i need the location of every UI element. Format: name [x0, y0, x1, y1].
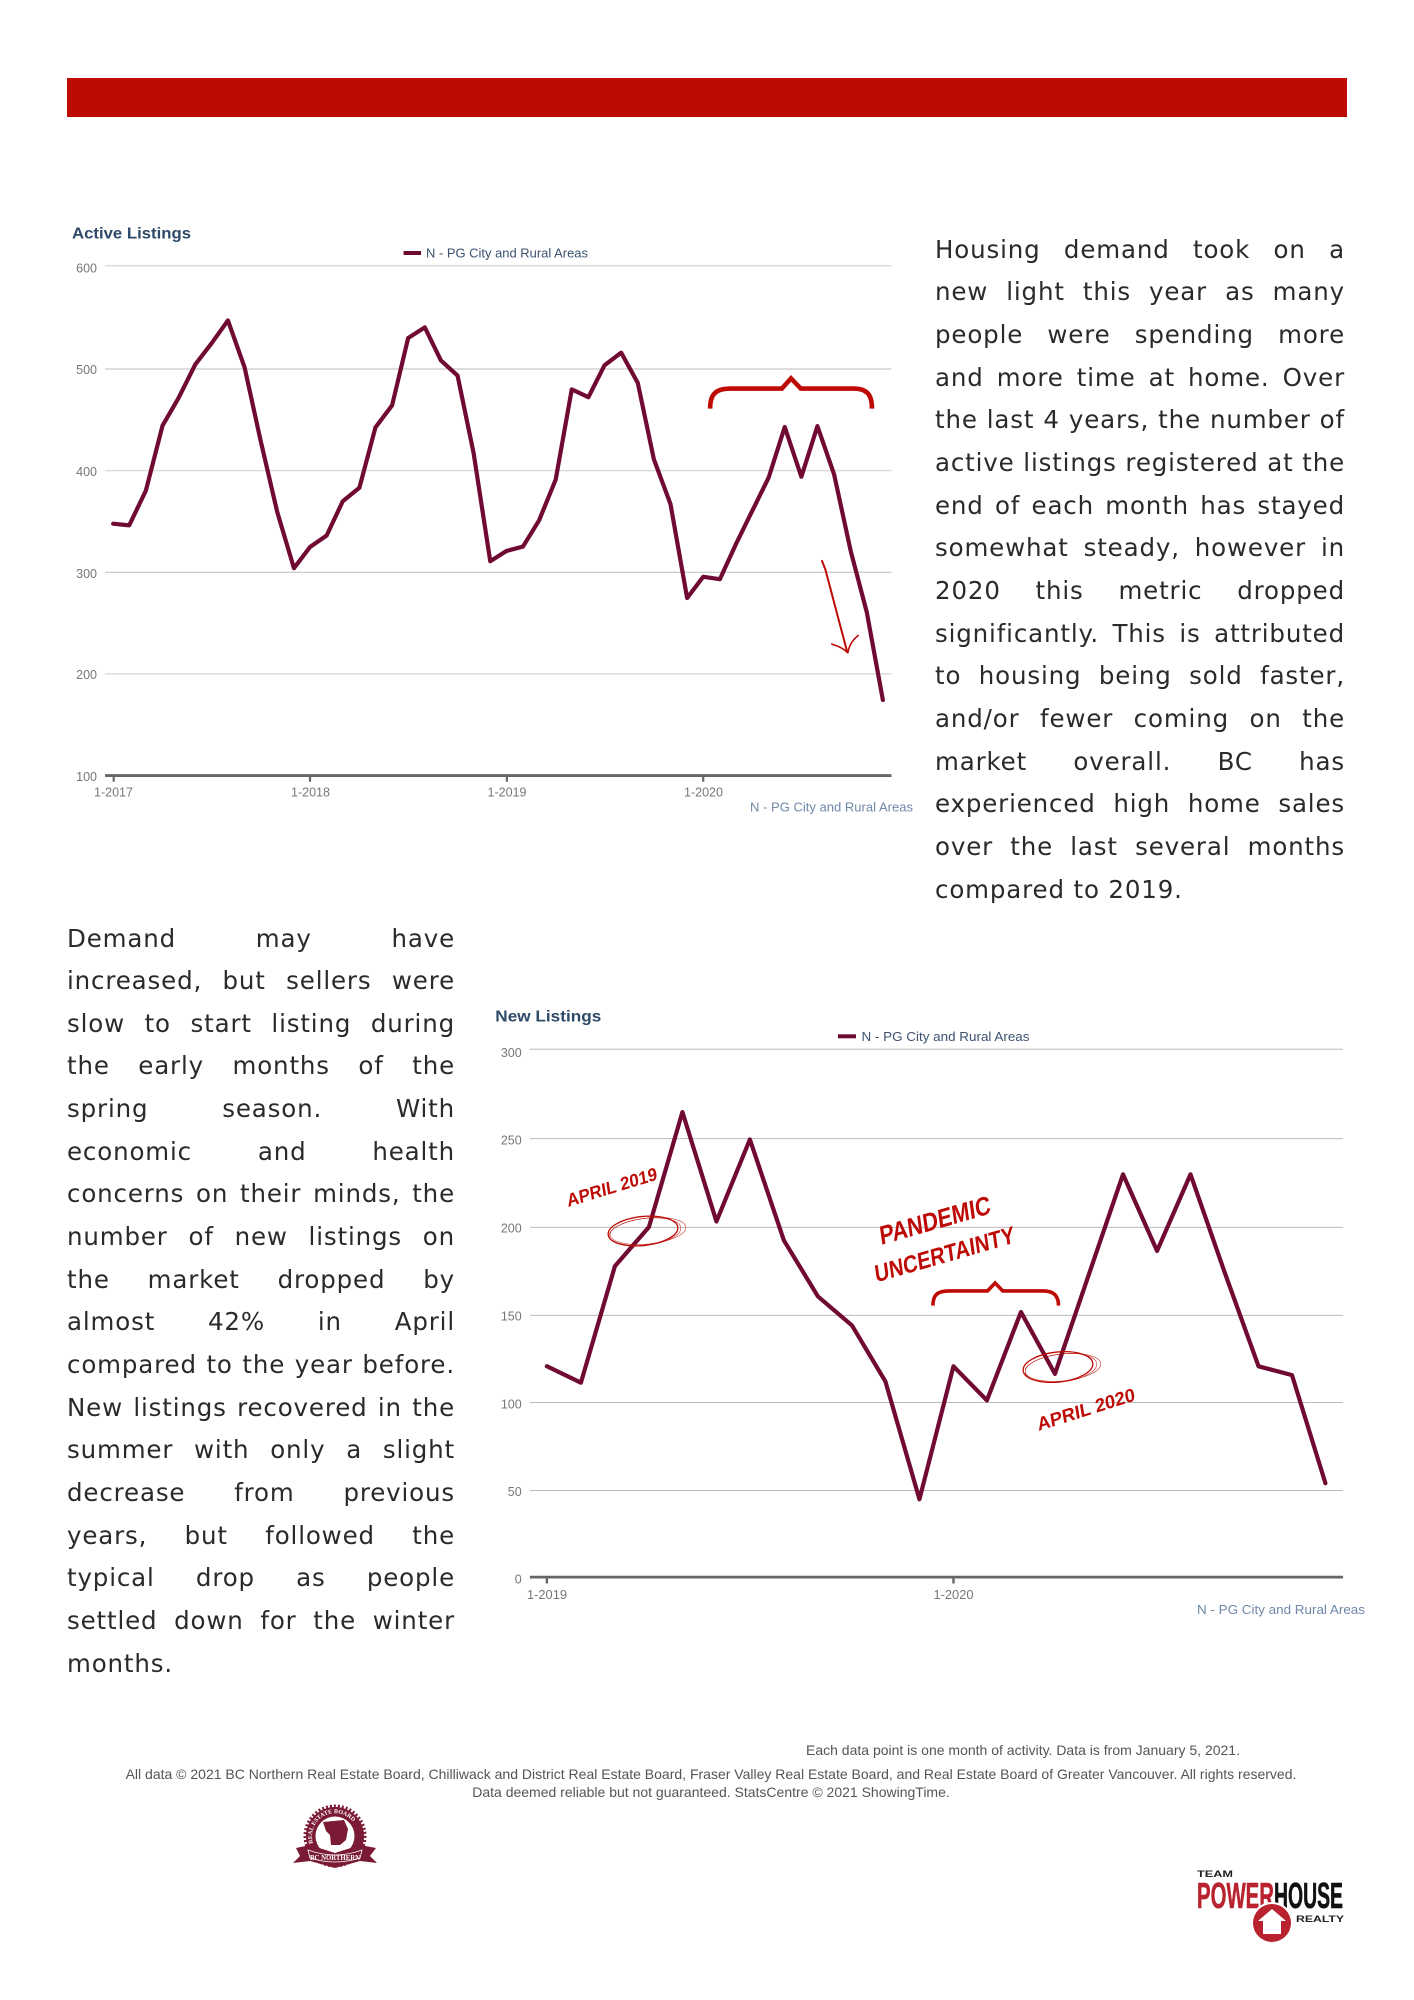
- source label: active listings: N - PG City and Rural Areas: [750, 800, 913, 814]
- y axis labels: new listings: 150: [501, 1310, 522, 1324]
- paragraph: new listings demand: months.: [67, 1649, 173, 1678]
- paragraph: new listings demand: almost 42% in April: [67, 1307, 455, 1336]
- x axis labels: active listings: [94, 786, 723, 800]
- paragraph: housing demand: active listings registered at the: [935, 448, 1345, 477]
- paragraph: new listings demand: slow to start listing during: [67, 1009, 455, 1038]
- y axis labels: new listings: 250: [501, 1134, 522, 1148]
- data line: new listings: [547, 1112, 1325, 1499]
- red header band: [67, 78, 1347, 117]
- logo: bc northern real estate board seal: BC NORTHERN: [310, 1853, 361, 1862]
- annotation: april 2019 circle: [607, 1213, 687, 1250]
- annotation: pandemic uncertainty label: UNCERTAINTY: [873, 1222, 1016, 1288]
- y axis labels: active listings: 400: [76, 465, 97, 479]
- x axis labels: active listings: 1-2020: [684, 786, 723, 800]
- logo: team powerhouse realty: POWER: [1197, 1875, 1274, 1916]
- paragraph: housing demand: the last 4 years, the number of: [935, 405, 1345, 434]
- paragraph: new listings demand: concerns on their minds, the: [67, 1179, 455, 1208]
- chart: active listings: [72, 226, 913, 814]
- paragraph: new listings demand: compared to the year before.: [67, 1350, 455, 1379]
- y axis labels: active listings: 200: [76, 668, 97, 682]
- logo: team powerhouse realty: TEAM: [1197, 1869, 1233, 1880]
- paragraph: housing demand: and more time at home. Over: [935, 363, 1345, 392]
- annotation: april 2020 label: APRIL 2020: [1036, 1383, 1136, 1435]
- paragraph: new listings demand: number of new listings on: [67, 1222, 455, 1251]
- paragraph: housing demand: end of each month has stayed: [935, 491, 1345, 520]
- chart: new listings: [495, 1008, 1366, 1617]
- x axis labels: active listings: 1-2019: [488, 786, 527, 800]
- x axis labels: new listings: [527, 1588, 974, 1602]
- red down arrow annotation: [822, 561, 858, 653]
- paragraph: new listings demand: summer with only a slight: [67, 1435, 455, 1464]
- annotation: pandemic uncertainty label: [873, 1189, 1016, 1288]
- red brace annotation: [710, 378, 872, 409]
- paragraph: housing demand: to housing being sold faster,: [935, 661, 1345, 690]
- annotation: april 2020 circle: [1022, 1348, 1102, 1386]
- footer note: copyright: All data © 2021 BC Northern Real Estate Board, Chilliwack and District Real Estate Board, Fraser Valley Real Estate Board, and Real Estate Board of Greater Vancouver. All rights reserved.: [126, 1766, 1296, 1782]
- y axis labels: new listings: 300: [501, 1046, 522, 1060]
- paragraph: housing demand: and/or fewer coming on the: [935, 704, 1345, 733]
- paragraph: new listings demand: Demand may have: [67, 924, 455, 952]
- y axis labels: active listings: 300: [76, 567, 97, 581]
- paragraph: housing demand: experienced high home sales: [935, 789, 1345, 818]
- x axis labels: active listings: 1-2017: [94, 786, 133, 800]
- y axis labels: active listings: 500: [76, 363, 97, 377]
- paragraph: new listings demand: settled down for the winter: [67, 1606, 455, 1635]
- paragraph: housing demand: people were spending more: [935, 320, 1345, 349]
- annotation: red brace: [933, 1283, 1058, 1306]
- legend: new listings: N - PG City and Rural Areas: [862, 1029, 1030, 1044]
- footer note: data points: Each data point is one month of activity. Data is from January 5, 2021.: [806, 1742, 1240, 1758]
- paragraph: new listings demand: New listings recovered in the: [67, 1393, 455, 1422]
- y axis labels: new listings: 200: [501, 1222, 522, 1236]
- paragraph: new listings demand: economic and health: [67, 1137, 455, 1166]
- paragraph: housing demand: significantly. This is attributed: [935, 619, 1345, 648]
- paragraph: new listings demand: years, but followed the: [67, 1521, 455, 1550]
- paragraph: housing demand: [935, 235, 1345, 904]
- paragraph: new listings demand: spring season. With: [67, 1094, 455, 1123]
- paragraph: housing demand: over the last several months: [935, 832, 1345, 861]
- y axis labels: active listings: [76, 262, 97, 784]
- y axis labels: active listings: 100: [76, 770, 97, 784]
- paragraph: new listings demand: increased, but sellers were: [67, 966, 455, 995]
- logo: bc northern real estate board seal: [293, 1804, 377, 1868]
- logo: team powerhouse realty: [1197, 1869, 1345, 1942]
- paragraph: housing demand: new light this year as many: [935, 277, 1345, 306]
- logo: team powerhouse realty: REALTY: [1296, 1914, 1345, 1925]
- y axis labels: active listings: 600: [76, 262, 97, 276]
- paragraph: housing demand: market overall. BC has: [935, 747, 1345, 776]
- paragraph: housing demand: compared to 2019.: [935, 875, 1183, 904]
- legend: active listings: N - PG City and Rural Areas: [426, 246, 588, 260]
- paragraph: new listings demand: typical drop as people: [67, 1563, 455, 1592]
- paragraph: new listings demand: the market dropped by: [67, 1265, 455, 1294]
- footer note: copyright: Data deemed reliable but not guaranteed. StatsCentre © 2021 ShowingTime.: [472, 1784, 950, 1800]
- paragraph: housing demand: Housing demand took on a: [935, 235, 1345, 264]
- chart title: active listings: Active Listings: [72, 226, 191, 242]
- paragraph: new listings demand: decrease from previous: [67, 1478, 455, 1507]
- y axis labels: new listings: 0: [515, 1572, 522, 1586]
- annotation: april 2019 label: APRIL 2019: [565, 1164, 659, 1211]
- y axis labels: new listings: [501, 1046, 522, 1586]
- x axis labels: new listings: 1-2020: [934, 1588, 974, 1602]
- y axis labels: new listings: 50: [508, 1485, 522, 1499]
- paragraph: housing demand: 2020 this metric dropped: [935, 576, 1345, 605]
- footer note: copyright: [126, 1766, 1296, 1800]
- y axis labels: new listings: 100: [501, 1398, 522, 1412]
- source label: new listings: N - PG City and Rural Areas: [1197, 1602, 1366, 1617]
- paragraph: new listings demand: the early months of the: [67, 1051, 455, 1080]
- logo: bc northern real estate board seal: REAL ESTATE BOARD: [308, 1809, 356, 1844]
- chart title: new listings: New Listings: [495, 1008, 601, 1026]
- paragraph: new listings demand: [67, 924, 455, 1678]
- x axis labels: new listings: 1-2019: [527, 1588, 567, 1602]
- x axis labels: active listings: 1-2018: [291, 786, 330, 800]
- data line: active listings: [113, 320, 883, 700]
- annotation: pandemic uncertainty label: PANDEMIC: [878, 1189, 992, 1251]
- paragraph: housing demand: somewhat steady, however in: [935, 533, 1345, 562]
